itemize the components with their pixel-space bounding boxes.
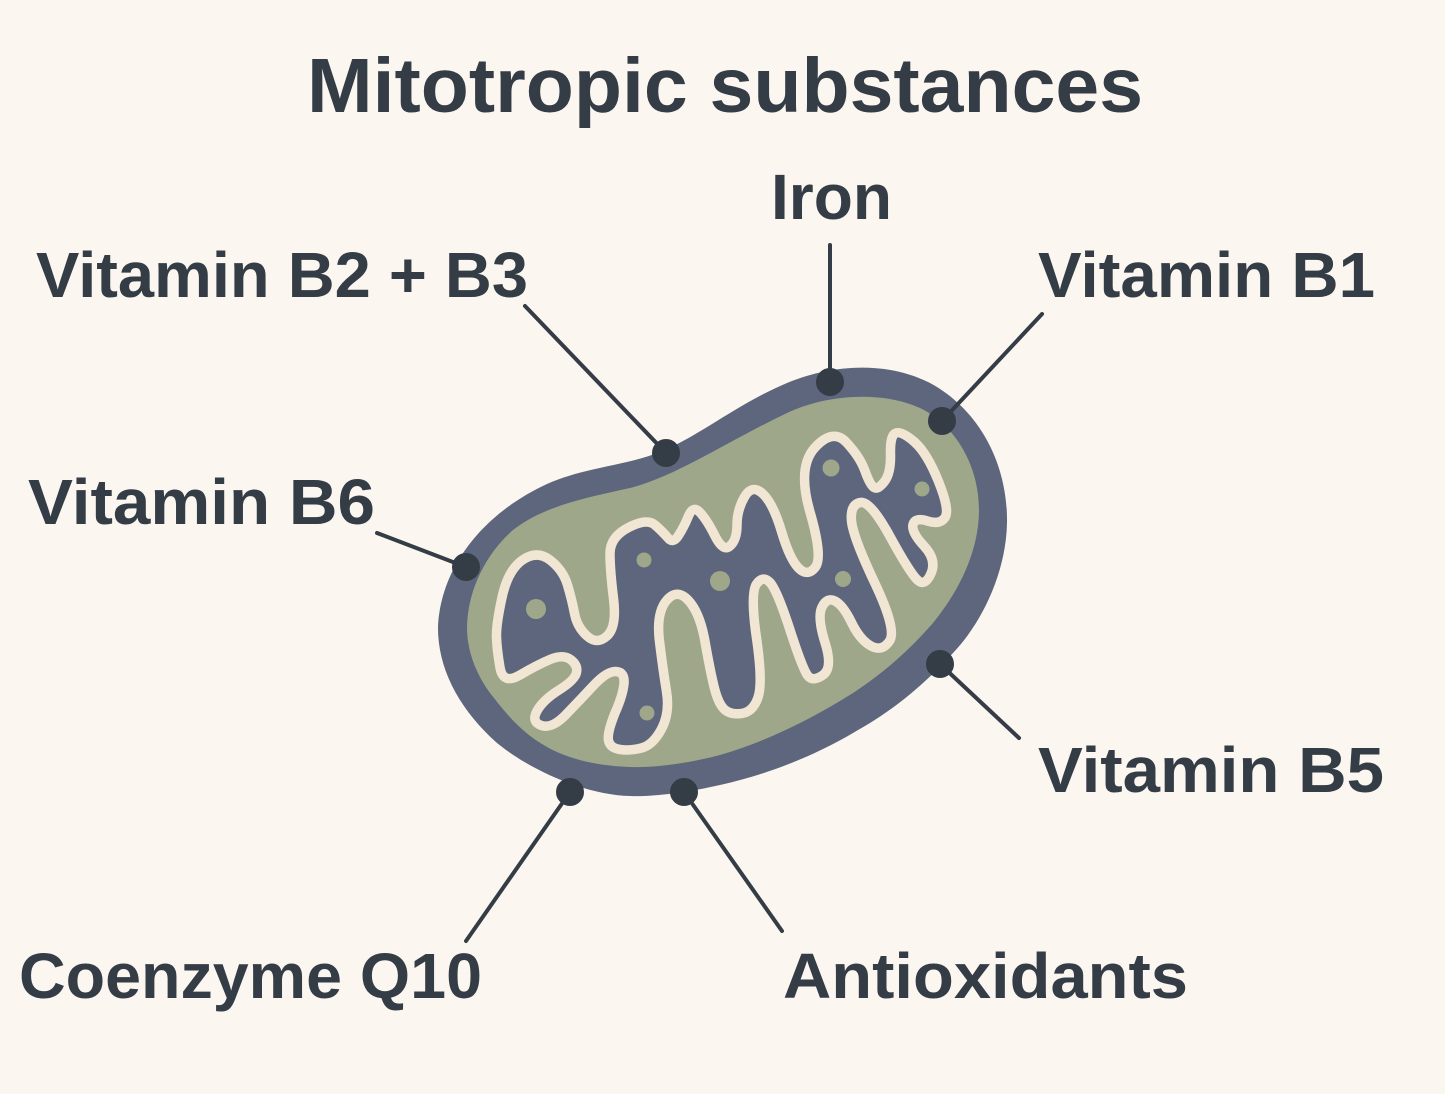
cristae folded inner membrane — [496, 433, 947, 750]
pointer: Iron — [818, 245, 842, 394]
label: Vitamin B2 + B3: Vitamin B2 + B3 — [36, 239, 528, 311]
label: Antioxidants: Antioxidants — [783, 940, 1188, 1012]
label: Coenzyme Q10: Coenzyme Q10 — [19, 940, 482, 1012]
title: Mitotropic substances — [307, 43, 1143, 129]
mitochondrion illustration — [438, 368, 1007, 796]
pointer: Vitamin B1 — [930, 314, 1042, 433]
label: Vitamin B5: Vitamin B5 — [1038, 734, 1384, 806]
pointer: Coenzyme Q10 — [466, 780, 582, 941]
label: Vitamin B1: Vitamin B1 — [1038, 239, 1375, 311]
pointer: Antioxidants — [672, 780, 782, 931]
label: Vitamin B6: Vitamin B6 — [28, 466, 375, 538]
pointer: Vitamin B2 + B3 — [525, 306, 678, 465]
outer membrane — [438, 368, 1007, 796]
label: Iron: Iron — [771, 161, 892, 233]
matrix granules — [526, 460, 930, 720]
green matrix — [467, 397, 979, 767]
pointer: Vitamin B5 — [928, 652, 1019, 738]
pointer: Vitamin B6 — [377, 533, 478, 579]
